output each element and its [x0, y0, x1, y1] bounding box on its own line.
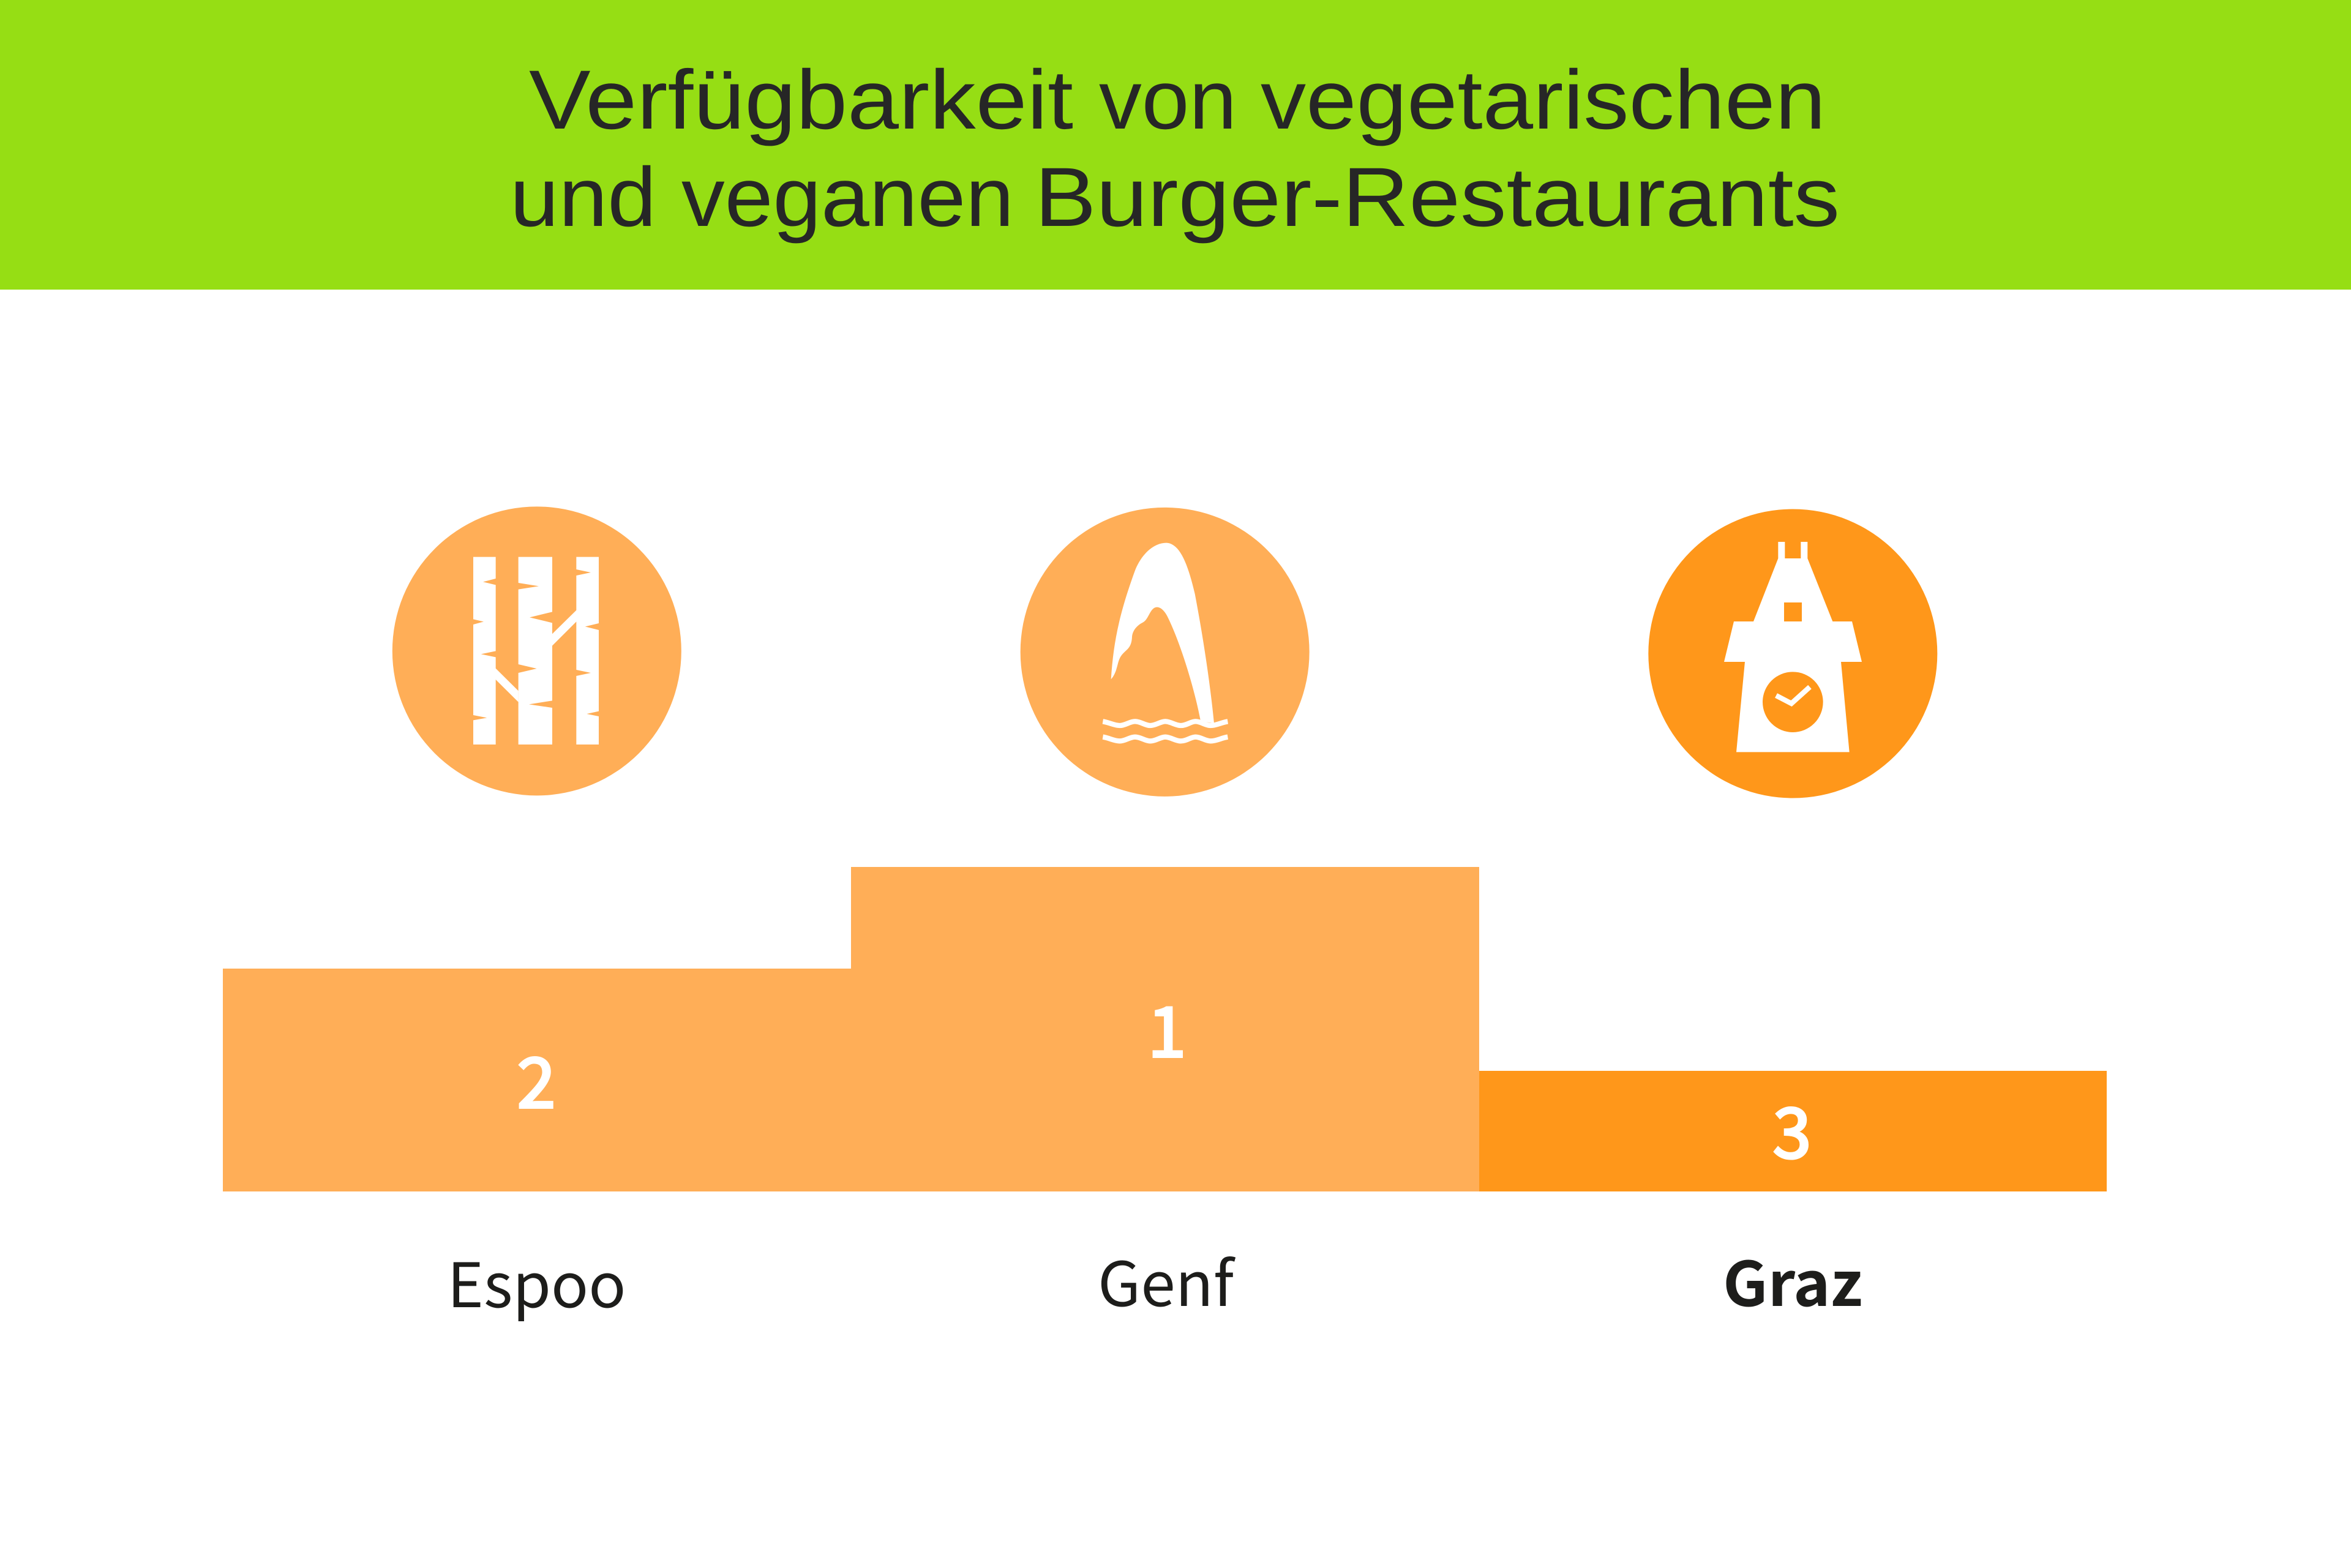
- value: Genf rank: 1: [1148, 977, 1186, 1077]
- title: Burger-Restaurants: [1035, 151, 1840, 244]
- bar: Graz: [1479, 1071, 2107, 1191]
- title: [510, 53, 1840, 244]
- icon: clock tower (Graz): [1648, 509, 1937, 798]
- value: Graz rank: 3: [1773, 1078, 1811, 1178]
- title: und: [510, 151, 656, 244]
- label: Espoo: Espoo: [447, 1236, 626, 1325]
- bar: Genf: [851, 867, 1479, 1191]
- title: von: [1099, 53, 1237, 147]
- icon: water fountain (Genf): [1021, 508, 1310, 797]
- title: vegetarischen: [1261, 53, 1826, 147]
- title: Verfügbarkeit: [529, 53, 1073, 147]
- label: Genf: Genf: [1098, 1235, 1236, 1324]
- bar: Espoo: [223, 969, 851, 1191]
- header band: [0, 0, 2351, 290]
- value: Espoo rank: 2: [517, 1027, 555, 1128]
- icon: birch trees (Espoo): [392, 506, 681, 795]
- title: veganen: [681, 151, 1014, 244]
- label: Graz: Graz: [1723, 1235, 1862, 1324]
